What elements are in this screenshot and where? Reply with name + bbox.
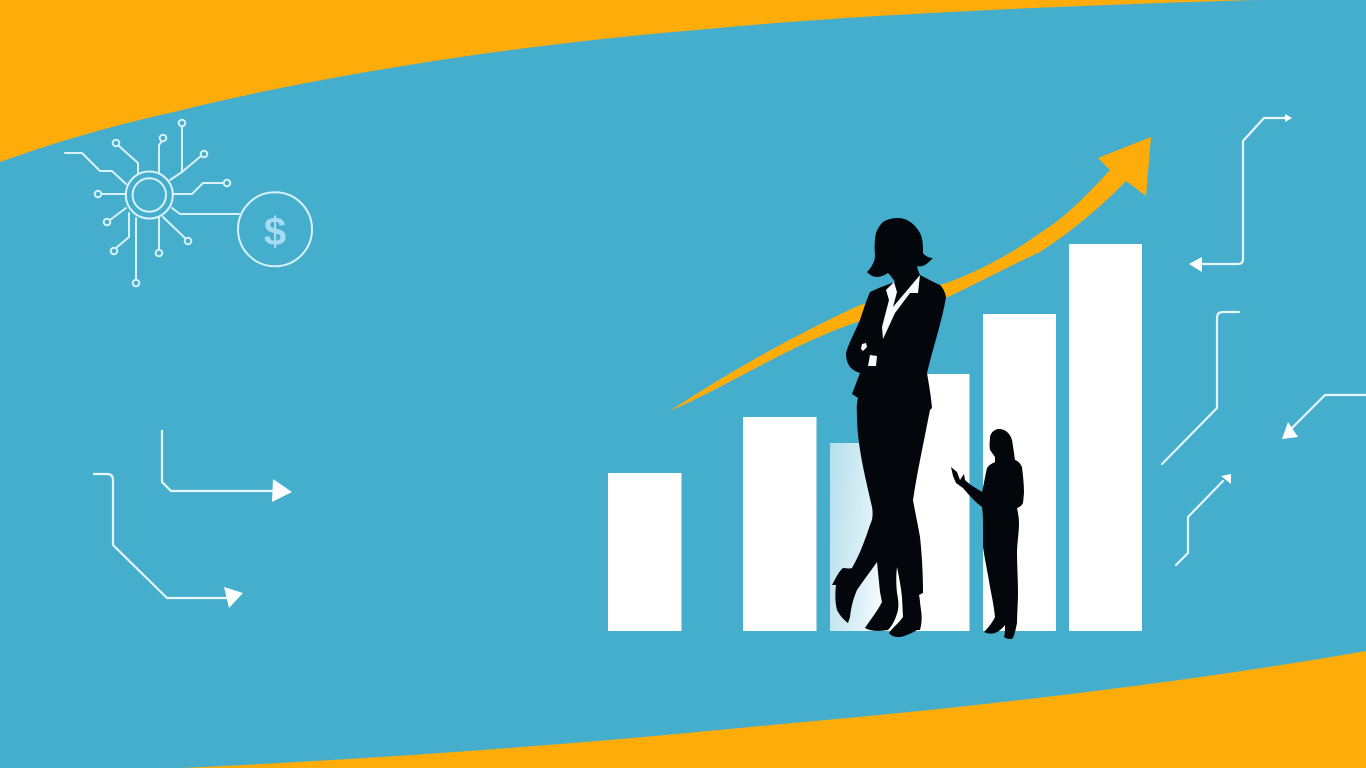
left arrow: upper right-pointing bbox=[162, 430, 292, 502]
white shirt collar bbox=[882, 275, 920, 339]
right arrow: top with two heads bbox=[1189, 114, 1292, 272]
top orange band bbox=[0, 0, 1254, 162]
dollar coin bbox=[238, 192, 312, 266]
small woman silhouette bbox=[951, 429, 1024, 639]
right arrow: pointing up-right bbox=[1176, 474, 1231, 565]
circuit nodes bbox=[95, 120, 230, 286]
bar 4 bbox=[896, 374, 970, 631]
bar 6 bbox=[1069, 244, 1142, 631]
bar 2 bbox=[743, 417, 816, 631]
bar 3 faded bbox=[830, 443, 900, 631]
circuit hub bbox=[126, 172, 173, 218]
right arrow: pointing down-left bbox=[1282, 395, 1366, 439]
left arrow: lower right-pointing bbox=[93, 474, 243, 608]
bar 1 bbox=[608, 473, 682, 631]
bar 5 bbox=[983, 314, 1056, 631]
shirt cuff lower bbox=[868, 355, 877, 366]
growth arrow bbox=[670, 137, 1151, 411]
dollar coin: $ bbox=[264, 210, 286, 254]
right decorative circuit line bbox=[1162, 312, 1239, 464]
bar chart bbox=[608, 244, 1142, 631]
shirt cuff upper bbox=[861, 343, 867, 351]
circuit icon with dollar coin bbox=[65, 120, 312, 286]
circuit traces bbox=[65, 127, 239, 279]
large woman silhouette bbox=[832, 218, 946, 637]
bottom orange band bbox=[181, 651, 1366, 768]
